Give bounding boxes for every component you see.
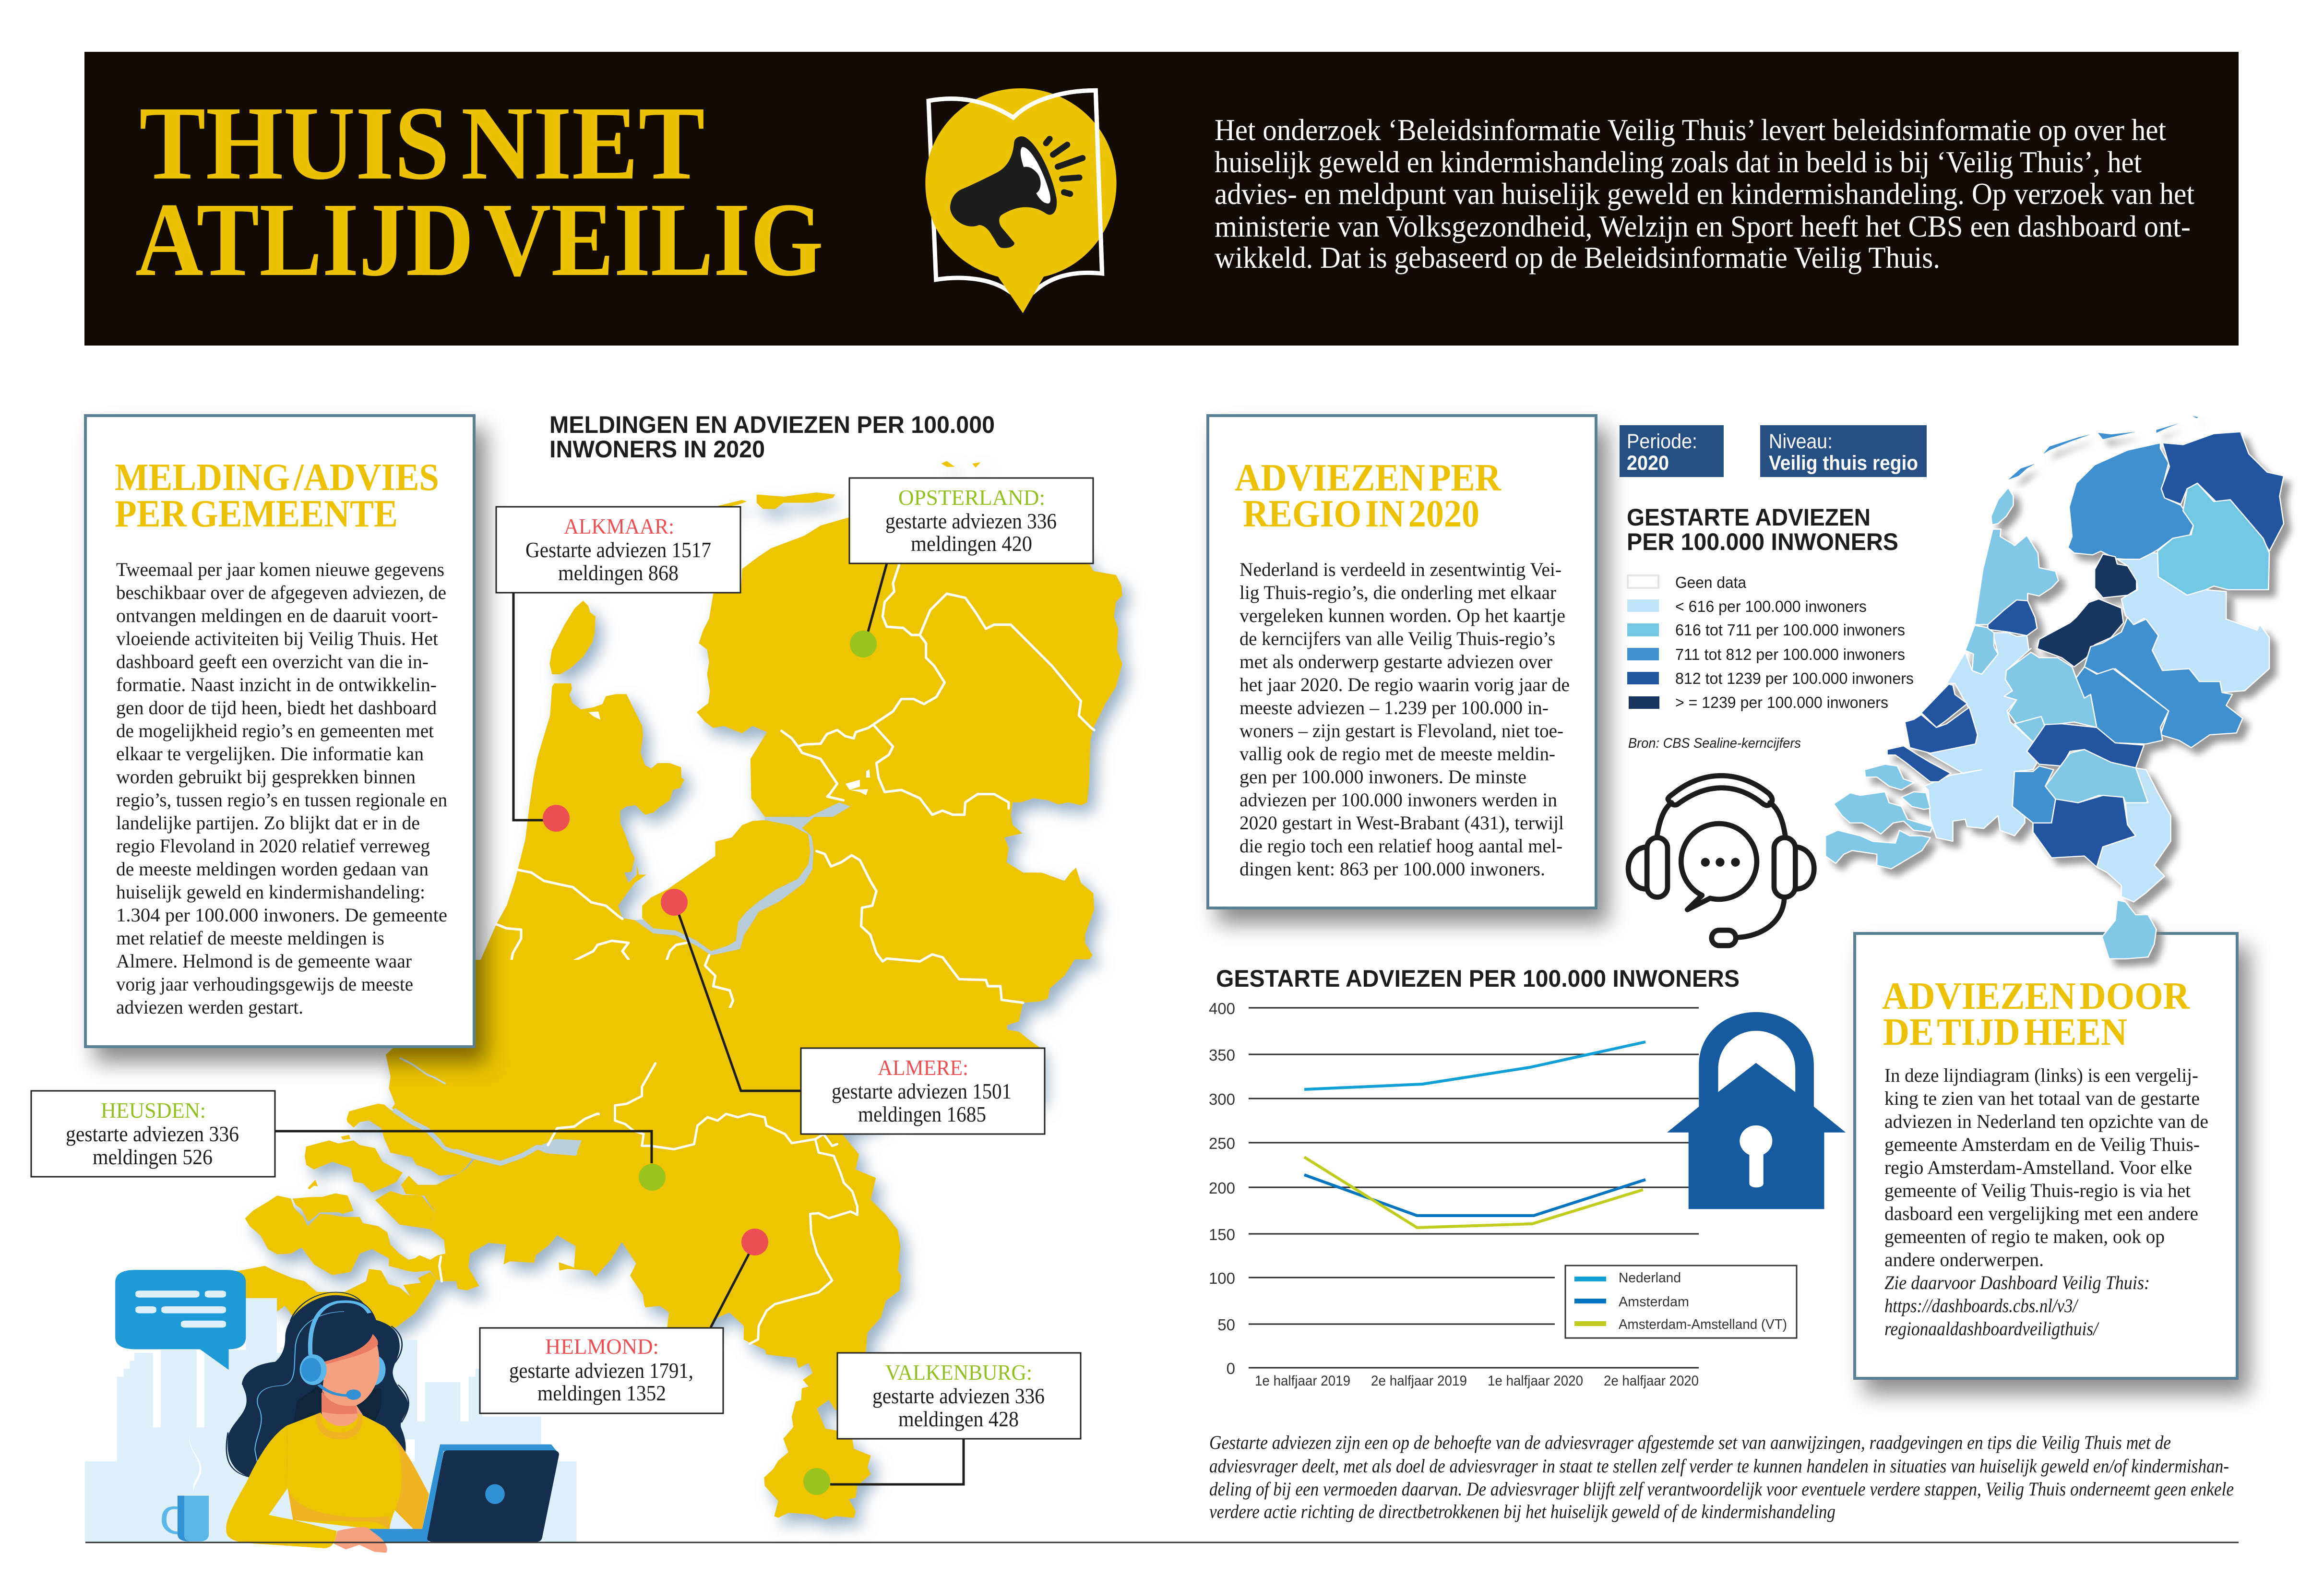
callout: Heusden: meldingen 526 [93,1145,213,1169]
body text: gemeente Amsterdam en de Veilig Thuis- [1884,1134,2200,1155]
body text: andere onderwerpen. [1884,1249,2044,1270]
heading: PER GEMEENTE [115,492,398,535]
body text: vallig ook de regio met de meeste meldin- [1239,743,1555,765]
body text: de mogelijkheid regio’s en gemeenten met [116,720,434,741]
body text: de kerncijfers van alle Veilig Thuis-regio’s [1239,628,1555,649]
callout: Almere: meldingen 1685 [858,1102,986,1126]
callout: Heusden: gestarte adviezen 336 [66,1122,239,1146]
map heading: MELDINGEN EN ADVIEZEN PER 100.000 [549,411,995,438]
body text: worden gebruikt bij gesprekken binnen [116,766,416,788]
callout: Heusden [31,1091,666,1191]
map legend: > = 1239 per 100.000 inwoners [1675,693,1888,711]
callout: Opsterland [849,478,1093,657]
intro text: Het onderzoek ‘Beleidsinformatie Veilig Thuis’ levert beleidsinformatie op over het [1215,113,2166,147]
body text: regionaaldashboardveiligthuis/ [1884,1318,2099,1339]
callout: Alkmaar: ALKMAAR: [564,514,674,538]
tag: niveau: Veilig thuis regio [1769,452,1918,475]
callout: Helmond: HELMOND: [545,1335,659,1359]
line chart: gestarte adviezen: 1e halfjaar 2020 [1488,1373,1583,1389]
body text: Zie daarvoor Dashboard Veilig Thuis: [1884,1272,2150,1293]
header banner [84,52,2239,346]
body text: gemeenten of regio te maken, ook op [1884,1226,2165,1247]
body text: ontvangen meldingen en de daaruit voort- [116,605,438,626]
body text [1239,559,1570,880]
axis labels: 100 [1209,1269,1235,1287]
body text: dashboard geeft een overzicht van die in- [116,651,429,672]
callout: Helmond [480,1229,768,1413]
icon: chat bubble [115,1270,246,1370]
line chart: gestarte adviezen: 2e halfjaar 2019 [1371,1373,1467,1389]
body text: https://dashboards.cbs.nl/v3/ [1884,1295,2079,1316]
map: blue regions choropleth [1825,416,2284,959]
axis labels: 0 [1227,1360,1235,1377]
body text: het jaar 2020. De regio waarin vorig jaar de [1239,674,1570,695]
body text: vloeiende activiteiten bij Veilig Thuis. Het [116,628,438,649]
line chart: gestarte adviezen: 1e halfjaar 2019 [1255,1373,1350,1389]
panel: adviezen per regio [1208,416,1596,908]
body text: gemeente of Veilig Thuis-regio is via het [1884,1180,2191,1201]
body text: de meeste meldingen worden gedaan van [116,858,429,880]
icon: headset with speech bubble [1628,776,1814,945]
body text: 2020 gestart in West-Brabant (431), terwijl [1239,812,1564,834]
body text: Almere. Helmond is de gemeente waar [116,950,412,972]
axis labels: 400 [1209,1000,1235,1017]
legend title [1627,504,1898,555]
map: yellow Netherlands [225,461,1122,1519]
body text: formatie. Naast inzicht in de ontwikkelin- [116,674,437,695]
body text: Nederland is verdeeld in zesentwintig Vei- [1239,559,1561,580]
intro text: wikkeld. Dat is gebaseerd op de Beleidsinformatie Veilig Thuis. [1215,241,1940,275]
axis labels: 50 [1217,1316,1235,1334]
body text: landelijke partijen. Zo blijkt dat er in de [116,812,420,834]
map legend: 616 tot 711 per 100.000 inwoners [1675,621,1905,639]
body text: regio’s, tussen regio’s en tussen regionale en [116,789,447,811]
icon: laptop [422,1445,559,1542]
footnote: verdere actie richting de directbetrokkenen bij het huiselijk geweld of de kindermishandeling [1209,1501,1835,1522]
chart legend [1565,1266,1797,1338]
map heading: INWONERS IN 2020 [549,436,765,463]
body text: die regio toch een relatief hoog aantal mel- [1239,835,1562,857]
body text: vergeleken kunnen worden. Op het kaartje [1239,605,1565,626]
callout: Alkmaar: Gestarte adviezen 1517 [525,538,711,562]
tag: niveau: Niveau: [1769,430,1833,453]
footnote [1209,1432,2234,1522]
body text: lig Thuis-regio’s, die onderling met elkaar [1239,582,1556,603]
body text: dingen kent: 863 per 100.000 inwoners. [1239,858,1545,880]
body text: met relatief de meeste meldingen is [116,927,384,949]
body text: met als onderwerp gestarte adviezen over [1239,651,1552,672]
body text: elkaar te vergelijken. Die informatie kan [116,743,424,765]
body text: adviezen werden gestart. [116,996,303,1018]
callout: Helmond: meldingen 1352 [537,1381,666,1405]
title: ATLIJD VEILIG [135,181,823,298]
axis labels: 250 [1209,1135,1235,1152]
title: THUIS NIET [139,84,705,202]
heading [1235,456,1502,535]
legend title: PER 100.000 INWONERS [1627,528,1898,555]
heading: ADVIEZEN DOOR [1882,974,2190,1017]
body text: 1.304 per 100.000 inwoners. De gemeente [116,904,447,926]
axis labels: 350 [1209,1046,1235,1064]
woman with headset [226,1292,429,1553]
tag: niveau [1760,425,1927,477]
body text: In deze lijndiagram (links) is een vergelij- [1884,1064,2198,1086]
chart legend: Nederland [1619,1270,1681,1286]
callout: Heusden: HEUSDEN: [101,1099,206,1123]
callout: Valkenburg: VALKENBURG: [885,1361,1032,1385]
body text: huiselijk geweld en kindermishandeling: [116,881,425,903]
data lines [1304,1042,1645,1228]
line chart: gestarte adviezen [1209,965,1797,1389]
axis labels [1209,1000,1235,1377]
chart legend: Amsterdam-Amstelland (VT) [1619,1317,1787,1332]
body text: adviezen per 100.000 inwoners werden in [1239,789,1557,811]
line chart: gestarte adviezen: 2e halfjaar 2020 [1604,1373,1699,1389]
body text: king te zien van het totaal van de gestarte [1884,1087,2200,1109]
body text: dasboard een vergelijking met een andere [1884,1203,2198,1224]
chart title: GESTARTE ADVIEZEN PER 100.000 INWONERS [1216,965,1740,992]
callout: Almere: ALMERE: [878,1056,968,1080]
body text: gen per 100.000 inwoners. De minste [1239,766,1526,788]
callout: Valkenburg: gestarte adviezen 336 [872,1384,1045,1408]
chart legend: Amsterdam [1619,1294,1689,1310]
intro text: advies- en meldpunt van huiselijk geweld en kindermishandeling. Op verzoek van het [1215,177,2194,211]
callout: Opsterland: meldingen 420 [911,532,1032,556]
body text [116,559,447,1018]
axis labels: 150 [1209,1226,1235,1243]
tag: periode: Periode: [1627,430,1697,453]
axis labels: 200 [1209,1179,1235,1197]
body text [1884,1064,2208,1339]
heading: ADVIEZEN PER [1235,456,1502,499]
panel: melding advies per gemeente [85,416,474,1047]
map legend: Geen data [1675,573,1747,591]
map heading [549,411,995,463]
tag: periode [1620,425,1724,477]
callout: Almere: gestarte adviezen 1501 [832,1079,1012,1103]
map legend: 711 tot 812 per 100.000 inwoners [1675,645,1905,663]
callout: Opsterland: OPSTERLAND: [898,486,1045,510]
illustration: call-centre woman [85,1270,576,1553]
map legend: 812 tot 1239 per 100.000 inwoners [1675,669,1914,687]
legend title: GESTARTE ADVIEZEN [1627,504,1871,531]
callout: Alkmaar [496,507,740,832]
callout: Valkenburg: meldingen 428 [898,1407,1019,1431]
heading: REGIO IN 2020 [1243,492,1479,535]
title [135,84,823,298]
callout: Almere [661,889,1045,1134]
icon: house-shaped padlock [1667,1012,1846,1209]
intro text [1215,113,2194,275]
footnote: Gestarte adviezen zijn een op de behoefte van de adviesvrager afgestemde set van aanwijzingen, raadgevingen en tips die Veilig Thuis met de [1209,1432,2171,1453]
callout: Valkenburg [803,1353,1081,1495]
body text: Tweemaal per jaar komen nieuwe gegevens [116,559,444,580]
map legend: < 616 per 100.000 inwoners [1675,597,1867,615]
callout: Helmond: gestarte adviezen 1791, [509,1359,693,1383]
body text: woners – zijn gestart is Flevoland, niet toe- [1239,720,1563,741]
body text: vorig jaar verhoudingsgewijs de meeste [116,973,413,995]
heading: DE TIJD HEEN [1883,1010,2127,1053]
body text: meeste adviezen – 1.239 per 100.000 in- [1239,697,1549,718]
callout: Opsterland: gestarte adviezen 336 [885,509,1057,533]
body text: gen door de tijd heen, biedt het dashboard [116,697,437,718]
body text: adviezen in Nederland ten opzichte van de [1884,1111,2208,1132]
heading [1882,974,2190,1053]
heading [115,455,439,535]
map legend [1627,573,1914,751]
map legend: Bron: CBS Sealine-kerncijfers [1628,736,1801,751]
axis labels: 300 [1209,1090,1235,1108]
body text: regio Flevoland in 2020 relatief verreweg [116,835,430,857]
intro text: huiselijk geweld en kindermishandeling zoals dat in beeld is bij ‘Veilig Thuis’, het [1215,145,2142,179]
callout: Alkmaar: meldingen 868 [558,561,679,585]
tag: periode: 2020 [1627,452,1669,475]
intro text: ministerie van Volksgezondheid, Welzijn en Sport heeft het CBS een dashboard ont- [1215,210,2191,243]
icon: coffee mug [164,1434,209,1541]
heading: MELDING /ADVIES [115,455,439,499]
body text: regio Amsterdam-Amstelland. Voor elke [1884,1157,2192,1178]
panel: adviezen door de tijd heen [1855,933,2237,1378]
icon: megaphone in speech pin over open book [925,88,1117,313]
body text: beschikbaar over de afgegeven adviezen, de [116,582,446,603]
